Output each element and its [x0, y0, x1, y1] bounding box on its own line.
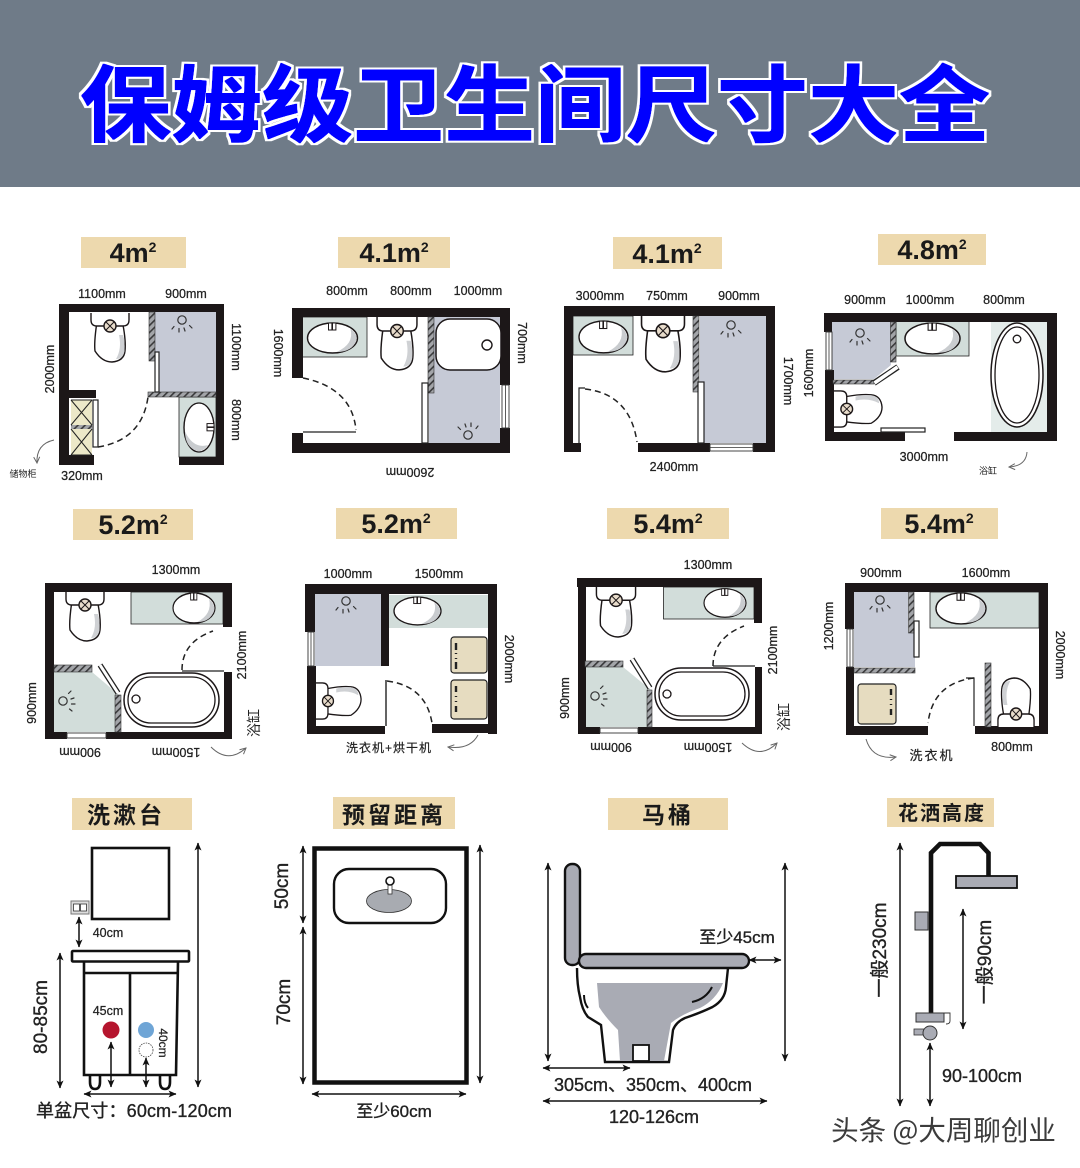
- sink counter: [573, 316, 633, 355]
- door: [579, 388, 637, 443]
- window: [847, 629, 853, 667]
- vanity labels: 单盆尺寸：60cm-120cm: [36, 1101, 232, 1121]
- area tag 5.2m²: 5.2m: [98, 510, 160, 540]
- toilet labels: 至少45cm: [699, 928, 775, 947]
- shower area: [155, 312, 216, 392]
- socket: [71, 901, 89, 914]
- dimensions: [558, 558, 792, 754]
- toilet: [596, 587, 636, 637]
- sink counter: [930, 592, 1039, 628]
- sink counter: [301, 317, 367, 357]
- dimensions: 900mm: [165, 287, 207, 301]
- washer: [451, 637, 487, 673]
- dimensions: 1600mm: [802, 349, 816, 397]
- dimensions: 浴缸: [776, 703, 792, 731]
- heading 预留距离: [333, 797, 455, 829]
- panel: 5.4m² plan B: [822, 508, 1067, 763]
- dimensions: 1600mm: [962, 566, 1010, 580]
- dimensions: 800mm: [229, 399, 243, 441]
- dimensions: 800mm: [326, 284, 368, 298]
- dimensions: 1200mm: [822, 602, 836, 650]
- dimensions: 2000mm: [502, 635, 516, 683]
- area tag 5.2m²: [73, 509, 193, 540]
- bathtub: [991, 322, 1047, 432]
- vanity labels: 40cm: [93, 926, 123, 940]
- dimensions: 1500mm: [152, 745, 200, 759]
- dimensions: 2100mm: [766, 626, 780, 674]
- shower head bar: [956, 876, 1017, 888]
- dimensions: 900mm: [59, 745, 101, 759]
- dimensions: 1300mm: [152, 563, 200, 577]
- window: [308, 632, 314, 666]
- bathtub: [124, 673, 219, 727]
- heading 马桶: 马桶: [642, 802, 694, 828]
- dimensions: 750mm: [646, 289, 688, 303]
- toilet bowl: [577, 968, 728, 1062]
- door: [93, 397, 148, 447]
- trap opening: [633, 1045, 649, 1061]
- heading 马桶: [608, 798, 728, 830]
- walls: [577, 578, 762, 734]
- walls: [845, 583, 1048, 735]
- sink: [579, 321, 628, 353]
- window: [600, 728, 638, 733]
- room outline: [314, 848, 466, 1082]
- shower area: [429, 317, 500, 443]
- dimensions: [324, 567, 516, 755]
- panel: 5.2m² plan B: [305, 508, 516, 755]
- shower head: [870, 596, 890, 612]
- glass door inner: [100, 665, 118, 693]
- dimensions: 2000mm: [1053, 631, 1067, 679]
- mirror: [92, 848, 169, 919]
- vanity labels: 80-85cm: [31, 980, 52, 1054]
- sink: [905, 323, 960, 354]
- shower head: [721, 321, 741, 337]
- area tag 4m²: 4m: [110, 238, 149, 268]
- toilet labels: 120-126cm: [609, 1107, 699, 1127]
- dimensions: 900mm: [558, 677, 572, 719]
- dimensions: 洗衣机: [909, 748, 955, 763]
- area tag 5.4m²: [607, 508, 729, 539]
- glass door inner: [632, 659, 650, 688]
- shower tray: [436, 319, 501, 370]
- dimensions: 1700mm: [781, 357, 795, 405]
- walls: [59, 304, 224, 465]
- door: [881, 428, 925, 432]
- dryer: [451, 680, 487, 719]
- glass door: [632, 659, 650, 688]
- toilet labels: [554, 928, 775, 1127]
- dimensions: 3000mm: [576, 289, 624, 303]
- heading 预留距离: 预留距离: [342, 802, 446, 828]
- window: [826, 332, 832, 370]
- area tag 5.4m²: 2: [695, 510, 703, 526]
- walls: [292, 308, 510, 453]
- shower head: [59, 691, 75, 711]
- panel: clearance: [272, 797, 480, 1121]
- door: [303, 378, 356, 432]
- shower area: [700, 316, 766, 443]
- clearance labels: [272, 863, 432, 1121]
- shower area: [854, 592, 915, 667]
- dimensions: 3000mm: [900, 450, 948, 464]
- area tag 5.2m²: 2: [423, 510, 431, 526]
- partition walls: [854, 592, 991, 727]
- bathtub: [655, 668, 749, 720]
- glass door inner: [874, 367, 898, 383]
- shower arrows: [900, 843, 963, 1106]
- panel: vanity heights: [31, 798, 232, 1121]
- dimensions: 900mm: [590, 740, 632, 754]
- shower labels: 一般230cm: [869, 902, 891, 998]
- dimensions: [9, 287, 243, 483]
- shower labels: 90-100cm: [942, 1066, 1022, 1086]
- shower labels: [869, 902, 1022, 1086]
- clearance arrows: [303, 845, 480, 1094]
- shower labels: 一般90cm: [974, 920, 996, 1004]
- dimensions: 1500mm: [684, 740, 732, 754]
- tank: [565, 864, 580, 965]
- sink: [936, 593, 986, 624]
- area tag 4.1m²: 4.1m: [359, 238, 421, 268]
- sink: [308, 323, 358, 353]
- partition walls: [833, 322, 896, 384]
- dimensions: 900mm: [860, 566, 902, 580]
- panel: 5.4m² plan A: [558, 508, 792, 754]
- toilet arrows: [543, 863, 785, 1101]
- dimensions: 2000mm: [43, 345, 57, 393]
- area tag 4.1m²: 2: [421, 239, 429, 255]
- area tag 5.4m²: 2: [966, 510, 974, 526]
- panel: 5.2m² plan A: [25, 509, 262, 759]
- dimensions: 1000mm: [324, 567, 372, 581]
- glass door: [422, 383, 428, 443]
- partition wall: [693, 316, 699, 392]
- area tag 4.1m²: 2: [694, 240, 702, 256]
- heading 花洒高度: 花洒高度: [898, 801, 986, 825]
- dimensions: [25, 563, 262, 759]
- walls: [564, 306, 775, 452]
- glass door: [914, 621, 919, 657]
- sink counter: [389, 595, 488, 628]
- toilet: [377, 317, 417, 370]
- area tag 5.2m²: [336, 508, 457, 539]
- clearance labels: 50cm: [272, 863, 293, 909]
- walls: [305, 584, 497, 734]
- dimensions: 800mm: [983, 293, 1025, 307]
- door: [182, 631, 224, 671]
- area tag 4.1m²: 4.1m: [632, 239, 694, 269]
- sink: [704, 589, 746, 617]
- dimensions: 1300mm: [684, 558, 732, 572]
- toilet: [642, 316, 684, 372]
- dimensions: 320mm: [61, 469, 103, 483]
- toilet: [91, 313, 129, 362]
- glass door: [874, 367, 898, 383]
- area tag 4.1m²: [613, 237, 722, 269]
- vanity labels: 45cm: [93, 1004, 123, 1018]
- shower head: [850, 329, 870, 345]
- dimensions: 1000mm: [454, 284, 502, 298]
- sink counter: [179, 397, 216, 457]
- dimensions: 900mm: [844, 293, 886, 307]
- dimensions: 800mm: [390, 284, 432, 298]
- bowl shading: [597, 983, 723, 1061]
- glass door: [155, 352, 159, 392]
- dimensions: 浴缸: [246, 709, 262, 737]
- toilet labels: 305cm、350cm、400cm: [554, 1075, 752, 1095]
- shower head: [591, 686, 607, 706]
- window: [710, 444, 753, 451]
- dimensions: 浴缸: [979, 465, 997, 476]
- valve: [914, 1013, 950, 1040]
- dimensions: 储物柜: [9, 468, 37, 479]
- dimensions: 1600mm: [271, 329, 285, 377]
- panel: 4.1m² plan A: [271, 237, 529, 479]
- sink counter: [896, 321, 969, 356]
- dimensions: [271, 284, 529, 479]
- dimensions: [802, 293, 1027, 476]
- cabinet: [72, 951, 189, 1089]
- partition walls: [148, 312, 216, 397]
- shower area: [832, 322, 891, 379]
- vanity labels: [31, 926, 232, 1121]
- title: 保姆级卫生间尺寸大全: [80, 39, 990, 160]
- toilet: [998, 678, 1034, 727]
- dimensions: 1500mm: [415, 567, 463, 581]
- window: [67, 733, 106, 738]
- sink: [173, 593, 215, 623]
- panel: 4m² plan: [9, 237, 243, 483]
- dimensions: [576, 289, 795, 474]
- sink counter: [664, 587, 754, 619]
- dimensions: 700mm: [515, 322, 529, 364]
- shower area: [315, 594, 381, 666]
- dimensions: 2100mm: [235, 631, 249, 679]
- walls: [45, 583, 232, 739]
- water pipes: [102, 1022, 154, 1057]
- dimensions: 洗衣机+烘干机: [346, 740, 432, 755]
- door: [713, 626, 755, 666]
- shower area: [585, 667, 651, 727]
- partition walls: [585, 661, 652, 727]
- shower head: [336, 597, 356, 613]
- area tag 4m²: 2: [149, 239, 157, 255]
- sink counter: [131, 592, 223, 624]
- sink: [394, 597, 441, 625]
- clearance labels: 70cm: [274, 979, 295, 1025]
- vanity arrows: [60, 843, 198, 1094]
- area tag 4.8m²: 2: [959, 236, 967, 252]
- shower head: [458, 423, 478, 439]
- area tag 5.4m²: 5.4m: [633, 509, 695, 539]
- area tag 4.1m²: [338, 237, 450, 268]
- vanity labels: 40cm: [156, 1028, 170, 1058]
- area tag 5.4m²: 5.4m: [904, 509, 966, 539]
- dimensions: 2600mm: [386, 465, 434, 479]
- highlights: [584, 987, 712, 1008]
- area tag 4m²: [81, 237, 186, 268]
- dimensions: 800mm: [991, 740, 1033, 754]
- toilet: [66, 592, 104, 641]
- panel: toilet side view: [543, 798, 785, 1127]
- heading 洗漱台: 洗漱台: [87, 802, 165, 828]
- window: [502, 385, 509, 428]
- door: [386, 680, 432, 726]
- walls: [824, 313, 1057, 441]
- partition wall: [428, 317, 434, 393]
- seat: [579, 954, 749, 968]
- heading 洗漱台: [72, 798, 192, 830]
- door: [928, 678, 974, 726]
- area tag 5.4m²: [881, 508, 998, 539]
- glass door: [100, 665, 118, 693]
- counter with basin: [334, 869, 446, 923]
- dimensions: 900mm: [718, 289, 760, 303]
- header band: [0, 0, 1080, 187]
- area tag 5.2m²: 2: [160, 511, 168, 527]
- shower area: [54, 672, 119, 732]
- dimensions: 2400mm: [650, 460, 698, 474]
- wall bracket: [915, 912, 928, 930]
- shower head: [172, 316, 192, 332]
- dimensions: 1100mm: [78, 287, 126, 301]
- dimensions: [822, 566, 1067, 763]
- toilet: [834, 391, 882, 427]
- panel: 4.1m² plan B: [564, 237, 795, 474]
- partition walls: [54, 665, 121, 732]
- dimensions: 1100mm: [229, 323, 243, 371]
- washer: [858, 684, 896, 724]
- toilet: [316, 683, 361, 719]
- glass door: [698, 382, 704, 443]
- dimensions: 900mm: [25, 682, 39, 724]
- area tag 4.8m²: 4.8m: [897, 235, 959, 265]
- panel: 4.8m² plan: [802, 234, 1057, 476]
- watermark: 头条 @大周聊创业: [831, 1108, 1056, 1148]
- area tag 5.2m²: 5.2m: [361, 509, 423, 539]
- panel: shower height: [869, 798, 1022, 1106]
- sink: [184, 403, 214, 452]
- storage cabinet: [71, 400, 92, 455]
- clearance labels: 至少60cm: [356, 1102, 432, 1121]
- heading 花洒高度: [887, 798, 994, 827]
- shower pipe: [931, 844, 988, 1013]
- dimensions: 1000mm: [906, 293, 954, 307]
- area tag 4.8m²: [878, 234, 986, 265]
